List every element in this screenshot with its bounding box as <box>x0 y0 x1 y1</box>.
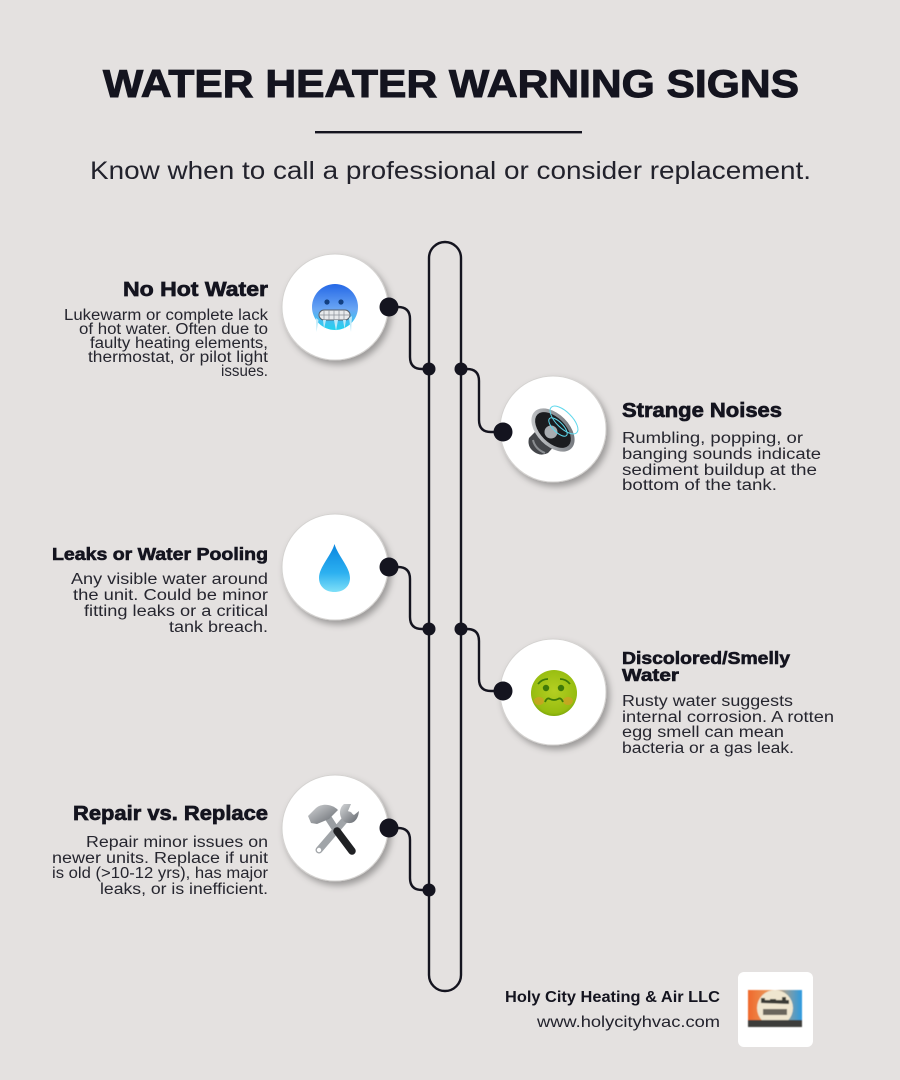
description <box>71 571 268 636</box>
heading: Water <box>622 665 679 685</box>
icon circle: frozen face <box>282 254 388 360</box>
description: faulty heating elements, <box>90 335 268 352</box>
description <box>622 693 834 757</box>
description: newer units. Replace if unit <box>52 850 269 867</box>
description: is old (>10-12 yrs), has major <box>52 865 268 882</box>
subtitle: Know when to call a professional or consider replacement. <box>90 157 811 185</box>
icon circle: speaker <box>500 376 606 482</box>
connector: strange noises <box>454 362 503 432</box>
description: leaks, or is inefficient. <box>100 881 268 898</box>
panel: repair vs replace <box>52 775 436 898</box>
connector: discolored water <box>454 622 503 691</box>
central timeline track <box>429 242 461 991</box>
description: egg smell can mean <box>622 724 784 741</box>
description: bacteria or a gas leak. <box>622 740 794 757</box>
description: Any visible water around <box>71 571 268 588</box>
panel: leaks <box>52 514 436 636</box>
heading: Discolored/Smelly <box>622 648 790 668</box>
connector: leaks <box>389 567 436 636</box>
heading: No Hot Water <box>123 279 268 301</box>
heading <box>622 648 790 685</box>
heading: Repair vs. Replace <box>73 803 268 825</box>
icon circle: nauseated face <box>500 639 606 745</box>
description: of hot water. Often due to <box>79 321 268 338</box>
footer: website: www.holycityhvac.com <box>536 1014 720 1031</box>
description: bottom of the tank. <box>622 477 777 494</box>
description: Repair minor issues on <box>86 834 268 851</box>
connector: repair vs replace <box>389 828 436 896</box>
panel: no hot water <box>64 254 436 380</box>
description: thermostat, or pilot light <box>88 349 269 366</box>
description: sediment buildup at the <box>622 462 817 479</box>
panel: strange noises <box>454 362 821 494</box>
heading: Strange Noises <box>622 400 782 422</box>
description: internal corrosion. A rotten <box>622 709 834 726</box>
description: banging sounds indicate <box>622 446 821 463</box>
description <box>622 430 821 494</box>
icon circle: tools <box>282 775 388 881</box>
icon circle: water drop <box>282 514 388 620</box>
title: WATER HEATER WARNING SIGNS <box>103 63 799 106</box>
description: tank breach. <box>169 619 268 636</box>
footer: logo <box>738 972 813 1047</box>
description: Rumbling, popping, or <box>622 430 803 447</box>
connector: no hot water <box>389 307 436 376</box>
description: fitting leaks or a critical <box>84 603 268 620</box>
description <box>64 307 269 380</box>
footer: company name: Holy City Heating & Air LLC <box>505 989 720 1006</box>
description <box>52 834 269 898</box>
description: the unit. Could be minor <box>73 587 268 604</box>
heading: Leaks or Water Pooling <box>52 544 268 564</box>
panel: discolored water <box>454 622 834 757</box>
description: issues. <box>221 363 268 380</box>
description: Rusty water suggests <box>622 693 793 710</box>
description: Lukewarm or complete lack <box>64 307 268 324</box>
